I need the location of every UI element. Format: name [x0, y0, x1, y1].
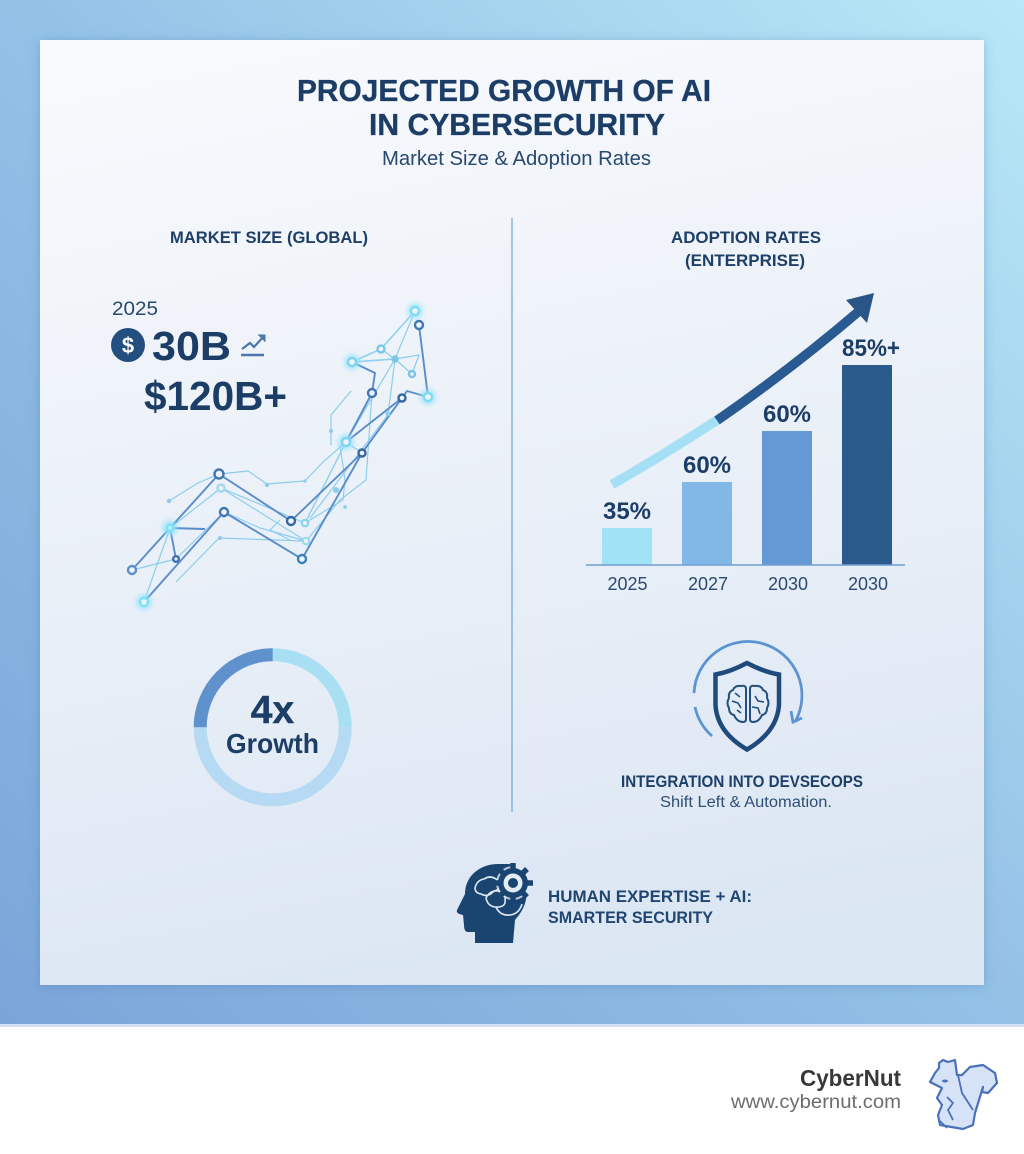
growth label: 4x [251, 689, 294, 732]
heading: market size: MARKET SIZE (GLOBAL) [170, 229, 368, 247]
value labels: 60% [763, 401, 811, 428]
text: integration into devsecops [621, 773, 863, 811]
small dots [167, 412, 390, 540]
icon: dollar coin [111, 328, 145, 362]
heading: adoption rates [671, 229, 821, 270]
subtitle: Market Size & Adoption Rates [382, 148, 651, 170]
icon: gear [493, 863, 533, 903]
market size figures: 30B [152, 323, 231, 369]
title: IN CYBERSECURITY [369, 107, 665, 142]
value labels: 60% [683, 452, 731, 479]
market size figures: $120B+ [144, 373, 287, 419]
faint connector lines [132, 311, 419, 602]
growth label [226, 689, 319, 759]
market size figures: 2025 [112, 299, 158, 320]
text: human expertise plus ai: HUMAN EXPERTISE + AI: [548, 888, 752, 906]
icon: small trend arrow [241, 335, 265, 355]
icon: shield with brain and cycle arrow [694, 642, 802, 750]
year labels [607, 574, 888, 594]
main dark polylines [132, 325, 428, 602]
center divider [511, 218, 513, 812]
text: human expertise plus ai [548, 888, 752, 927]
year labels: 2030 [768, 574, 808, 594]
icon: squirrel logo [930, 1060, 997, 1129]
heading: adoption rates: ADOPTION RATES [671, 229, 821, 247]
icon: dollar coin: $ [122, 333, 134, 358]
bar chart [586, 335, 905, 594]
title: PROJECTED GROWTH OF AI [297, 73, 711, 108]
footer brand text: CyberNut [800, 1065, 901, 1091]
growth ring [200, 655, 345, 800]
text: integration into devsecops: Shift Left & Automation. [660, 794, 832, 811]
year labels: 2025 [607, 574, 648, 594]
glow halos [137, 304, 435, 609]
network growth chart [128, 304, 435, 609]
value labels: 35% [603, 498, 651, 525]
icon: human head with brain and gear [457, 863, 533, 943]
node circles [128, 307, 432, 606]
growth label: Growth [226, 728, 319, 759]
title [297, 73, 711, 142]
footer brand text: www.cybernut.com [730, 1091, 901, 1113]
text: integration into devsecops: INTEGRATION INTO DEVSECOPS [621, 773, 863, 791]
text: human expertise plus ai: SMARTER SECURITY [548, 909, 713, 927]
bars [602, 365, 892, 565]
year labels: 2027 [688, 574, 728, 594]
heading: adoption rates: (ENTERPRISE) [685, 252, 805, 270]
footer brand text [730, 1065, 901, 1113]
value labels: 85%+ [842, 335, 900, 362]
arrow: adoption trend [612, 293, 874, 484]
market size figures [111, 299, 287, 419]
year labels: 2030 [848, 574, 888, 594]
value labels [603, 335, 900, 525]
main card panel [40, 40, 984, 985]
icon: brain [728, 686, 768, 722]
